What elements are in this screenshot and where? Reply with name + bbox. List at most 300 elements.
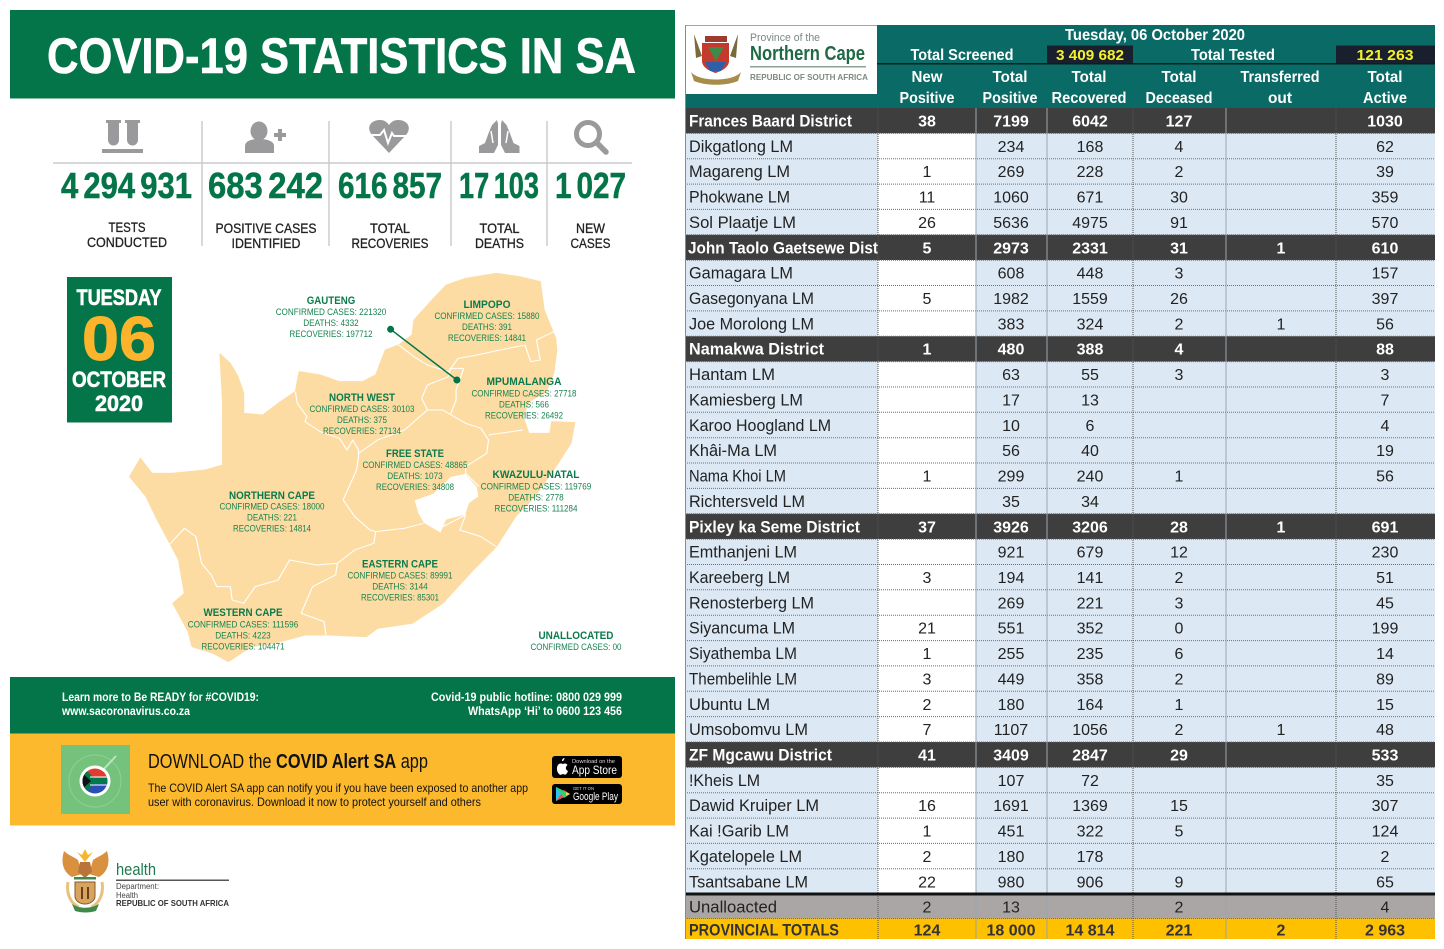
- row: Siyancuma LM: 352: [1077, 621, 1103, 638]
- row: Karoo Hoogland LM: [685, 412, 1435, 438]
- row: John Taolo Gaetsewe District: John Taolo Gaetsewe Dist: [688, 238, 878, 257]
- row: Dawid Kruiper LM: [685, 793, 1435, 818]
- row: Khâi-Ma LM: 19: [1376, 443, 1394, 460]
- label: Mpumalanga: [472, 376, 576, 422]
- row: Siyancuma LM: 551: [998, 621, 1024, 638]
- row: Dikgatlong LM: [685, 133, 1435, 159]
- row: Thembelihle LM: 89: [1376, 671, 1394, 688]
- green information band: [10, 677, 675, 734]
- icon: praying hands: [479, 120, 520, 153]
- row: Sol Plaatje LM: 5636: [993, 215, 1029, 232]
- row: Ubuntu LM: 164: [1077, 697, 1103, 714]
- row: Kgatelopele LM: 180: [998, 849, 1024, 866]
- green information band: Learn more to Be READY for #COVID19:: [62, 690, 259, 704]
- row: Tsantsabane LM: 22: [918, 874, 936, 891]
- table header: Deceased: [1146, 90, 1212, 107]
- label: Northern Cape: DEATHS: 221: [247, 512, 297, 524]
- row: Richtersveld LM: Richtersveld LM: [689, 492, 805, 511]
- label: Gauteng: RECOVERIES: 197712: [290, 329, 372, 340]
- row: Dawid Kruiper LM: 15: [1170, 798, 1188, 815]
- row: Khâi-Ma LM: 56: [1002, 443, 1020, 460]
- row: Sol Plaatje LM: 570: [1372, 215, 1398, 232]
- row: Frances Baard District: 127: [1166, 114, 1192, 130]
- row: Karoo Hoogland LM: 4: [1381, 418, 1390, 435]
- row: Khâi-Ma LM: Khâi-Ma LM: [689, 441, 777, 460]
- row: Phokwane LM: 30: [1170, 190, 1188, 207]
- row: Magareng LM: 39: [1376, 164, 1394, 181]
- label: Gauteng: DEATHS: 4332: [303, 318, 359, 329]
- row: Richtersveld LM: [685, 488, 1435, 514]
- row: Magareng LM: [685, 159, 1435, 184]
- row: Siyathemba LM: 1: [923, 646, 932, 663]
- row: Nama Khoi LM: [685, 463, 1435, 488]
- label: Western Cape: CONFIRMED CASES: 111596: [188, 620, 298, 630]
- department of health logo: Health: [116, 891, 138, 900]
- row: Emthanjeni LM: 679: [1077, 545, 1103, 562]
- label: Gauteng: CONFIRMED CASES: 221320: [276, 307, 386, 318]
- label: Unallocated: CONFIRMED CASES: 00: [530, 642, 622, 653]
- row: Magareng LM: Magareng LM: [689, 162, 790, 181]
- row: Namakwa District: 4: [1175, 342, 1184, 359]
- label: Eastern Cape: RECOVERIES: 85301: [361, 592, 439, 604]
- green information band: Covid-19 public hotline: 0800 029 999: [431, 690, 622, 704]
- row: Kgatelopele LM: 2: [1381, 849, 1390, 866]
- icon: heart with pulse: [368, 120, 410, 153]
- label: Eastern Cape: CONFIRMED CASES: 89991: [348, 570, 452, 582]
- row: Dikgatlong LM: 4: [1175, 139, 1184, 156]
- row: Karoo Hoogland LM: 10: [1002, 418, 1020, 435]
- green information band: WhatsApp ‘Hi’ to 0600 123 456: [468, 704, 622, 718]
- row: Siyancuma LM: Siyancuma LM: [689, 619, 795, 638]
- row: Kai !Garib LM: Kai !Garib LM: [689, 822, 789, 841]
- row: Siyathemba LM: 14: [1376, 646, 1394, 663]
- row: Gamagara LM: [685, 260, 1435, 286]
- row: Siyancuma LM: [685, 615, 1435, 641]
- row: John Taolo Gaetsewe District: 2973: [993, 240, 1029, 257]
- icon: national coat of arms: [63, 849, 108, 912]
- row: Renosterberg LM: Renosterberg LM: [689, 593, 814, 612]
- row: ZF Mgcawu District: [685, 742, 1435, 767]
- map of South Africa: [130, 273, 575, 662]
- row: Nama Khoi LM: 1: [1175, 469, 1184, 486]
- row: Provincial totals: 221: [1166, 922, 1192, 940]
- row: Provincial totals: 2 963: [1365, 922, 1405, 940]
- table header: Total: [1072, 69, 1106, 86]
- label: Limpopo: RECOVERIES: 14841: [448, 333, 526, 344]
- row: Emthanjeni LM: Emthanjeni LM: [689, 543, 797, 562]
- row: Dawid Kruiper LM: 1691: [993, 798, 1029, 815]
- row: !Kheis LM: 35: [1376, 773, 1394, 790]
- row: Umsobomvu LM: 7: [923, 722, 932, 739]
- row: Pixley ka Seme District: 1: [1277, 519, 1286, 536]
- row: Unalloacted: [685, 894, 1435, 918]
- row: Namakwa District: 480: [998, 342, 1024, 359]
- badge: Google Play: [552, 784, 622, 804]
- table header: Total Screened: [910, 47, 1014, 64]
- row: Karoo Hoogland LM: Karoo Hoogland LM: [689, 416, 831, 435]
- row: Joe Morolong LM: 56: [1376, 316, 1394, 333]
- row: Dawid Kruiper LM: Dawid Kruiper LM: [689, 796, 819, 815]
- date box: [67, 277, 172, 422]
- row: Pixley ka Seme District: 691: [1372, 519, 1398, 536]
- row: Pixley ka Seme District: 3926: [993, 519, 1029, 536]
- label: North West: RECOVERIES: 27134: [323, 426, 401, 437]
- row: Phokwane LM: [685, 184, 1435, 209]
- table header: Transferred: [1240, 69, 1320, 86]
- row: Gasegonyana LM: 5: [923, 291, 932, 308]
- label: Western Cape: RECOVERIES: 104471: [202, 642, 284, 652]
- row: Khâi-Ma LM: 40: [1081, 443, 1099, 460]
- stat: positive cases identified: [208, 122, 323, 251]
- stat: positive cases identified: IDENTIFIED: [232, 236, 301, 251]
- total screened value: 3 409 682: [1056, 47, 1124, 64]
- label: KwaZulu-Natal: [481, 469, 591, 514]
- row: Siyathemba LM: 6: [1175, 646, 1184, 663]
- row: Joe Morolong LM: 2: [1175, 316, 1184, 333]
- row: John Taolo Gaetsewe District: 610: [1372, 240, 1398, 257]
- row: Ubuntu LM: [685, 691, 1435, 717]
- row: Richtersveld LM: 34: [1081, 494, 1099, 511]
- row: Dikgatlong LM: 234: [998, 139, 1024, 156]
- row: Umsobomvu LM: 1107: [994, 722, 1028, 739]
- row: Emthanjeni LM: [685, 539, 1435, 565]
- row: Tsantsabane LM: [685, 869, 1435, 894]
- row: Frances Baard District: 7199: [993, 114, 1029, 130]
- row: Nama Khoi LM: Nama Khoi LM: [689, 467, 786, 486]
- row: Provincial totals: PROVINCIAL TOTALS: [689, 920, 839, 940]
- row: Umsobomvu LM: 2: [1175, 722, 1184, 739]
- row: Nama Khoi LM: 56: [1376, 469, 1394, 486]
- row: Magareng LM: 1: [923, 164, 932, 181]
- date box: 2020: [95, 391, 143, 416]
- row: Thembelihle LM: Thembelihle LM: [689, 669, 797, 688]
- row: Renosterberg LM: 3: [1175, 595, 1184, 612]
- row: Khâi-Ma LM: [685, 438, 1435, 463]
- row: Pixley ka Seme District: [685, 514, 1435, 539]
- badge: App Store: App Store: [572, 763, 617, 777]
- title banner: COVID-19 STATISTICS IN SA: [47, 28, 636, 84]
- row: Joe Morolong LM: 324: [1077, 316, 1103, 333]
- row: Sol Plaatje LM: 91: [1170, 215, 1188, 232]
- label: Western Cape: WESTERN CAPE: [204, 607, 282, 619]
- row: Gamagara LM: Gamagara LM: [689, 264, 793, 283]
- row: Kai !Garib LM: 322: [1077, 824, 1103, 841]
- row: Namakwa District: 1: [923, 342, 932, 359]
- row: ZF Mgcawu District: 41: [918, 748, 936, 764]
- label: Mpumalanga: RECOVERIES: 26492: [485, 410, 563, 422]
- row: Frances Baard District: 6042: [1072, 114, 1108, 130]
- badge: Google Play: Google Play: [573, 791, 618, 803]
- row: Umsobomvu LM: 1056: [1072, 722, 1108, 739]
- row: Namakwa District: 388: [1077, 342, 1103, 359]
- label: North West: [310, 392, 414, 437]
- row: Renosterberg LM: 269: [998, 595, 1024, 612]
- row: Frances Baard District: Frances Baard District: [689, 112, 852, 130]
- row: Gamagara LM: 157: [1372, 266, 1398, 283]
- department of health logo: health: [116, 860, 156, 879]
- date box: OCTOBER: [72, 367, 166, 392]
- label: Eastern Cape: EASTERN CAPE: [362, 558, 438, 570]
- table header: Total: [1162, 69, 1196, 86]
- row: Joe Morolong LM: [685, 311, 1435, 336]
- row: Pixley ka Seme District: 37: [918, 519, 936, 536]
- date box: 06: [82, 305, 156, 374]
- row: John Taolo Gaetsewe District: 1: [1277, 240, 1286, 257]
- row: Tsantsabane LM: 906: [1077, 874, 1103, 891]
- row: Provincial totals: 2: [1277, 922, 1286, 940]
- row: Pixley ka Seme District: 3206: [1072, 519, 1108, 536]
- row: Gasegonyana LM: 26: [1170, 291, 1188, 308]
- row: Dawid Kruiper LM: 1369: [1072, 798, 1108, 815]
- label: KwaZulu-Natal: RECOVERIES: 111284: [494, 504, 578, 514]
- icon: COVID Alert SA app: [61, 745, 130, 814]
- row: Siyancuma LM: 21: [918, 621, 936, 638]
- yellow app download band: [10, 734, 675, 826]
- table header: Recovered: [1052, 90, 1126, 107]
- label: Free State: CONFIRMED CASES: 48865: [362, 460, 468, 471]
- row: Ubuntu LM: Ubuntu LM: [689, 695, 770, 714]
- row: Phokwane LM: 671: [1077, 190, 1103, 207]
- row: Umsobomvu LM: [685, 717, 1435, 742]
- row: Kareeberg LM: 194: [998, 570, 1024, 587]
- row: Dawid Kruiper LM: 307: [1372, 798, 1398, 815]
- row: Frances Baard District: [685, 108, 1435, 133]
- row: Phokwane LM: 359: [1372, 190, 1398, 207]
- row: Kgatelopele LM: 178: [1077, 849, 1103, 866]
- row: John Taolo Gaetsewe District: 2331: [1072, 240, 1108, 257]
- row: Kamiesberg LM: 7: [1381, 392, 1390, 409]
- row: Magareng LM: 2: [1175, 164, 1184, 181]
- label: Limpopo: DEATHS: 391: [462, 322, 512, 333]
- row: Kareeberg LM: 141: [1077, 570, 1103, 587]
- stat: positive cases identified: 683 242: [208, 165, 323, 206]
- row: Tsantsabane LM: 980: [998, 874, 1024, 891]
- row: John Taolo Gaetsewe District: 31: [1170, 240, 1188, 257]
- row: Kareeberg LM: [685, 564, 1435, 590]
- row: Kareeberg LM: 2: [1175, 570, 1184, 587]
- row: ZF Mgcawu District: 2847: [1072, 748, 1108, 764]
- label: KwaZulu-Natal: DEATHS: 2778: [508, 492, 564, 504]
- row: !Kheis LM: [685, 767, 1435, 793]
- row: Hantam LM: [685, 362, 1435, 387]
- stat: total deaths: 17 103: [459, 165, 539, 206]
- stat: new cases: [555, 122, 626, 251]
- row: Phokwane LM: 11: [919, 190, 935, 207]
- row: Joe Morolong LM: 383: [998, 316, 1024, 333]
- label: Limpopo: LIMPOPO: [464, 299, 511, 311]
- row: Siyathemba LM: 255: [998, 646, 1024, 663]
- stat: total recoveries: TOTAL: [370, 221, 410, 236]
- row: Phokwane LM: Phokwane LM: [689, 188, 790, 207]
- row: !Kheis LM: !Kheis LM: [689, 771, 760, 790]
- label: Northern Cape: CONFIRMED CASES: 18000: [220, 502, 324, 512]
- row: Kamiesberg LM: 13: [1081, 392, 1099, 409]
- department of health logo: Department:: [116, 882, 159, 891]
- row: Frances Baard District: 38: [918, 114, 936, 130]
- row: Unalloacted: 4: [1381, 900, 1390, 916]
- row: Kareeberg LM: 51: [1376, 570, 1394, 587]
- row: Kareeberg LM: Kareeberg LM: [689, 568, 790, 587]
- row: Tsantsabane LM: Tsantsabane LM: [689, 872, 808, 891]
- row: Thembelihle LM: 2: [1175, 671, 1184, 688]
- table header: Positive: [982, 90, 1038, 107]
- row: Gasegonyana LM: 397: [1372, 291, 1398, 308]
- logo: Province of the Northern Cape: [686, 26, 877, 94]
- label: Limpopo: [434, 299, 540, 344]
- row: Ubuntu LM: 15: [1376, 697, 1394, 714]
- row: Provincial totals: 124: [914, 922, 940, 940]
- badge: App Store: Download on the: [572, 759, 615, 765]
- row: Joe Morolong LM: Joe Morolong LM: [689, 314, 814, 333]
- row: !Kheis LM: 72: [1081, 773, 1099, 790]
- row: Kgatelopele LM: [685, 843, 1435, 869]
- label: KwaZulu-Natal: CONFIRMED CASES: 119769: [481, 482, 591, 492]
- table header: [685, 25, 1435, 108]
- label: Unallocated: [530, 630, 622, 653]
- row: Kgatelopele LM: 2: [923, 849, 932, 866]
- label: Mpumalanga: DEATHS: 566: [499, 400, 549, 410]
- stat: new cases: CASES: [570, 236, 610, 251]
- badge: App Store: [552, 756, 622, 778]
- stat: tests conducted: TESTS: [108, 220, 146, 235]
- row: Pixley ka Seme District: Pixley ka Seme District: [689, 517, 860, 536]
- row: Unalloacted: 13: [1002, 900, 1020, 916]
- row: Gasegonyana LM: Gasegonyana LM: [689, 289, 814, 308]
- row: Emthanjeni LM: 12: [1170, 545, 1188, 562]
- row: Umsobomvu LM: Umsobomvu LM: [689, 720, 808, 739]
- stat: positive cases identified: POSITIVE CASES: [216, 221, 316, 236]
- total tested value: 121 263: [1356, 47, 1414, 64]
- row: Magareng LM: 269: [998, 164, 1024, 181]
- row: Hantam LM: Hantam LM: [689, 365, 775, 384]
- icon: magnifier: [576, 122, 606, 152]
- logo: Province of the Northern Cape: Province of the: [750, 32, 820, 44]
- row: ZF Mgcawu District: 533: [1372, 748, 1398, 764]
- row: Unalloacted: 2: [923, 900, 932, 916]
- row: Unalloacted: Unalloacted: [689, 898, 777, 916]
- stat: total recoveries: [338, 120, 442, 251]
- label: Mpumalanga: MPUMALANGA: [486, 376, 562, 388]
- row: Dikgatlong LM: Dikgatlong LM: [689, 137, 793, 156]
- stat: total recoveries: RECOVERIES: [352, 236, 428, 251]
- title banner: [10, 10, 675, 98]
- row: Dikgatlong LM: 168: [1077, 139, 1103, 156]
- row: Frances Baard District: 1030: [1367, 114, 1403, 130]
- row: Renosterberg LM: 45: [1376, 595, 1394, 612]
- label: North West: DEATHS: 375: [337, 415, 387, 426]
- row: Siyancuma LM: 0: [1175, 621, 1184, 638]
- row: Tsantsabane LM: 65: [1376, 874, 1394, 891]
- row: Thembelihle LM: [685, 666, 1435, 691]
- row: Siyathemba LM: 235: [1077, 646, 1103, 663]
- row: Gamagara LM: 3: [1175, 266, 1184, 283]
- row: Kai !Garib LM: 1: [923, 824, 932, 841]
- department of health logo: REPUBLIC OF SOUTH AFRICA: [116, 898, 229, 908]
- table header: Tuesday, 06 October 2020: [1065, 27, 1245, 44]
- row: Sol Plaatje LM: 26: [918, 215, 936, 232]
- row: Phokwane LM: 1060: [993, 190, 1029, 207]
- row: Emthanjeni LM: 230: [1372, 545, 1398, 562]
- stat: tests conducted: 4 294 931: [61, 165, 192, 206]
- table header: Active: [1363, 90, 1407, 107]
- yellow app download band: user with coronavirus. Download it now to protect yourself and others: [148, 795, 481, 809]
- label: Gauteng: GAUTENG: [307, 295, 355, 307]
- date box: TUESDAY: [76, 285, 162, 310]
- stat: total deaths: TOTAL: [480, 221, 520, 236]
- label: Free State: DEATHS: 1073: [387, 471, 443, 482]
- row: Karoo Hoogland LM: 6: [1086, 418, 1095, 435]
- row: Renosterberg LM: [685, 590, 1435, 615]
- row: Kai !Garib LM: 124: [1372, 824, 1398, 841]
- row: Pixley ka Seme District: 28: [1170, 519, 1188, 536]
- row: Gamagara LM: 448: [1077, 266, 1103, 283]
- label: Northern Cape: [220, 490, 324, 534]
- label: Eastern Cape: [348, 558, 452, 604]
- total tested value: [1336, 46, 1435, 64]
- row: Namakwa District: Namakwa District: [689, 340, 824, 359]
- row: ZF Mgcawu District: 3409: [993, 748, 1029, 764]
- label: Free State: RECOVERIES: 34808: [376, 482, 454, 493]
- row: Unalloacted: 2: [1175, 900, 1184, 916]
- yellow app download band: DOWNLOAD the COVID Alert SA app: [148, 751, 428, 773]
- stat: total deaths: DEATHS: [475, 236, 524, 251]
- row: Ubuntu LM: 1: [1175, 697, 1184, 714]
- row: Sol Plaatje LM: 4975: [1072, 215, 1108, 232]
- table header: Total Tested: [1191, 47, 1275, 64]
- row: Richtersveld LM: 35: [1002, 494, 1020, 511]
- stat: total deaths: [459, 120, 539, 251]
- label: Northern Cape: NORTHERN CAPE: [229, 490, 315, 502]
- row: Hantam LM: 63: [1002, 367, 1020, 384]
- row: Kamiesberg LM: 17: [1002, 392, 1020, 409]
- label: Unallocated: UNALLOCATED: [538, 630, 614, 642]
- yellow app download band: The COVID Alert SA app can notify you if you have been exposed to another app: [148, 781, 528, 795]
- label: Northern Cape: RECOVERIES: 14814: [233, 524, 311, 534]
- row: Namakwa District: 88: [1376, 342, 1394, 359]
- label: North West: CONFIRMED CASES: 30103: [310, 404, 414, 415]
- label: Free State: [362, 448, 468, 493]
- row: Gasegonyana LM: 1982: [993, 291, 1029, 308]
- row: Namakwa District: [685, 336, 1435, 362]
- icon: test tubes: [102, 120, 143, 153]
- table header: Positive: [900, 90, 955, 107]
- row: John Taolo Gaetsewe District: 5: [923, 240, 932, 257]
- badge: Google Play: GET IT ON: [573, 786, 594, 791]
- row: Dikgatlong LM: 62: [1376, 139, 1394, 156]
- gauteng leader line: [388, 326, 460, 383]
- row: Sol Plaatje LM: Sol Plaatje LM: [689, 213, 796, 232]
- row: Provincial totals: 14 814: [1066, 922, 1115, 940]
- row: Kareeberg LM: 3: [923, 570, 932, 587]
- row: Gasegonyana LM: 1559: [1072, 291, 1108, 308]
- department of health logo: [63, 849, 229, 912]
- logo: Province of the Northern Cape: REPUBLIC OF SOUTH AFRICA: [750, 72, 868, 82]
- row: Sol Plaatje LM: [685, 209, 1435, 235]
- row: Umsobomvu LM: 48: [1376, 722, 1394, 739]
- row: Joe Morolong LM: 1: [1277, 316, 1286, 333]
- label: Western Cape: DEATHS: 4223: [215, 630, 271, 642]
- row: Hantam LM: 55: [1081, 367, 1099, 384]
- row: Kai !Garib LM: 451: [998, 824, 1024, 841]
- stat: new cases: 1 027: [555, 165, 626, 206]
- label: Mpumalanga: CONFIRMED CASES: 27718: [472, 388, 576, 400]
- row: Emthanjeni LM: 921: [998, 545, 1024, 562]
- row: Kamiesberg LM: [685, 387, 1435, 412]
- row: Hantam LM: 3: [1381, 367, 1390, 384]
- label: Free State: FREE STATE: [386, 448, 444, 460]
- row: Siyathemba LM: Siyathemba LM: [689, 644, 797, 663]
- row: Thembelihle LM: 449: [998, 671, 1024, 688]
